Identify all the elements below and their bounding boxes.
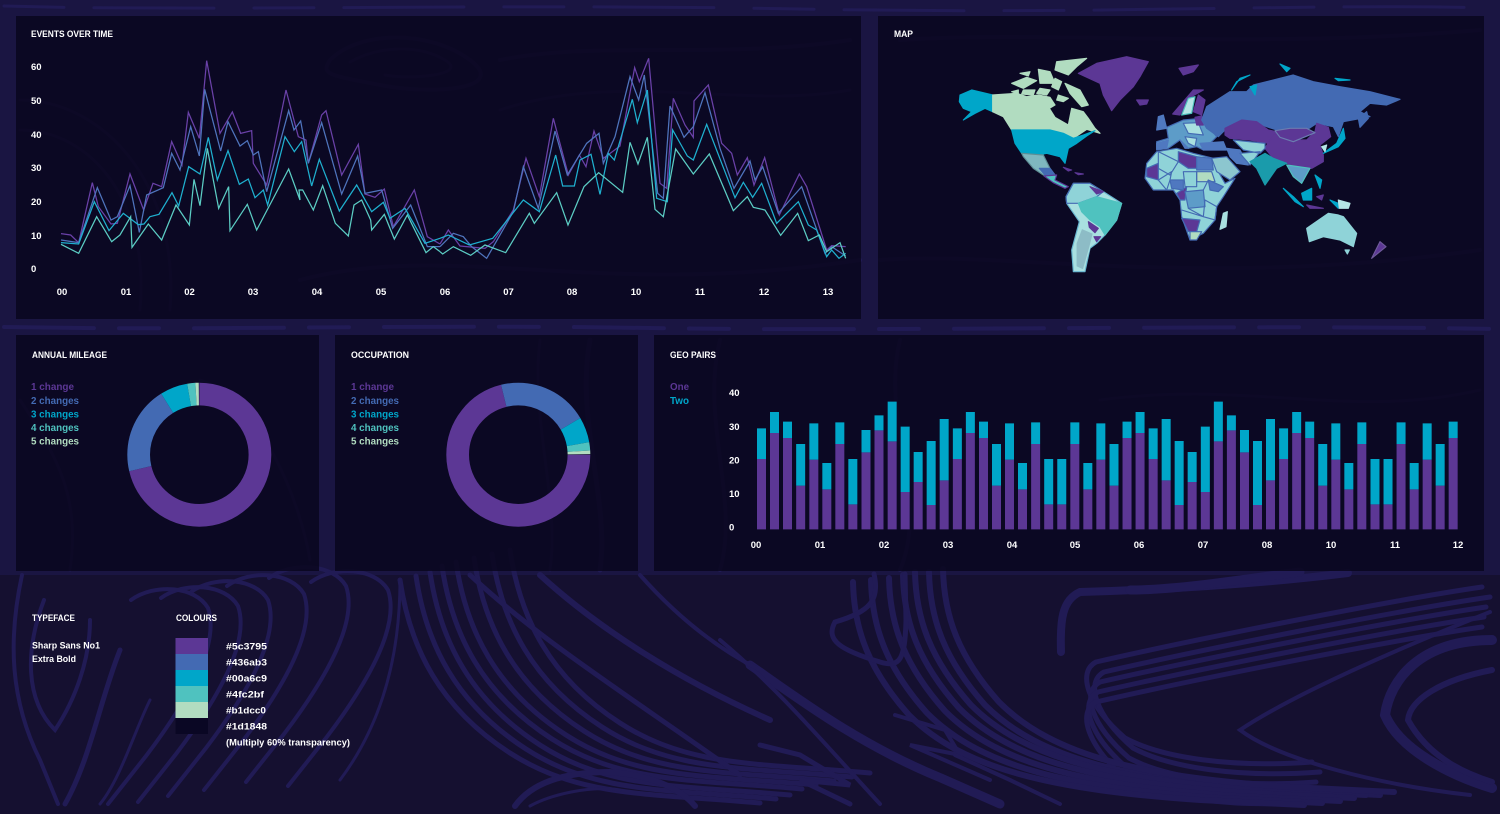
- legend: annual mileage: 5 changes: [31, 436, 79, 448]
- x axis: events: 12: [759, 287, 769, 298]
- legend: occupation: 3 changes: [351, 410, 399, 420]
- middle east and central asia: [1212, 140, 1265, 180]
- greenland and iceland: [1078, 57, 1198, 111]
- x axis: geo pairs: 07: [1198, 540, 1208, 551]
- x axis: geo pairs: 08: [1262, 540, 1272, 551]
- world map: [959, 57, 1400, 272]
- legend: occupation: 2 changes: [351, 396, 399, 407]
- y axis: events: 20: [31, 197, 42, 208]
- north america: [959, 58, 1100, 188]
- x axis: geo pairs: 12: [1453, 540, 1463, 551]
- colour codes: [226, 642, 350, 748]
- x axis: geo pairs: 00: [751, 540, 761, 551]
- x axis: events: 06: [440, 287, 450, 298]
- colour swatches: [176, 638, 208, 734]
- x axis: events: 08: [567, 287, 577, 298]
- panel: events over time: [16, 16, 861, 319]
- legend: annual mileage: 4 changes: [31, 423, 79, 434]
- legend: occupation: 1 change: [351, 382, 394, 393]
- russia: [1202, 75, 1400, 137]
- legend: annual mileage: 2 changes: [31, 396, 79, 407]
- colour codes: #00a6c9: [226, 674, 267, 684]
- y axis: geo pairs: [729, 388, 740, 534]
- x axis: events: 02: [184, 287, 195, 298]
- y axis: events: 10: [31, 231, 42, 242]
- heading: occupation: OCCUPATION: [351, 350, 409, 361]
- colour codes: #b1dcc0: [226, 706, 266, 716]
- y axis: events: 60: [31, 62, 42, 73]
- bars: two: [757, 402, 1458, 505]
- y axis: geo pairs: 30: [729, 422, 740, 433]
- line chart: events over time: [61, 58, 846, 258]
- legend: geo pairs: [670, 382, 689, 407]
- typeface name: Sharp Sans No1: [32, 640, 101, 652]
- x axis: geo pairs: 11: [1390, 540, 1401, 551]
- legend: annual mileage: [31, 382, 79, 448]
- donut: annual mileage: [139, 394, 260, 515]
- colour codes: #5c3795: [226, 642, 268, 652]
- panel: annual mileage: [16, 335, 319, 571]
- typeface name: [32, 640, 101, 665]
- y axis: events: 0: [31, 264, 36, 275]
- x axis: geo pairs: 05: [1070, 540, 1081, 551]
- y axis: geo pairs: 20: [729, 456, 740, 466]
- x axis: events: 01: [121, 287, 132, 298]
- legend: geo pairs: Two: [670, 396, 689, 407]
- bars: one: [757, 430, 1458, 529]
- south and southeast asia: [1250, 128, 1350, 208]
- x axis: geo pairs: [751, 540, 1463, 551]
- australia and new zealand: [1307, 213, 1386, 258]
- donut: occupation: [458, 394, 579, 515]
- y axis: geo pairs: 10: [729, 489, 740, 500]
- x axis: events: 10: [631, 287, 641, 298]
- y axis: geo pairs: 0: [729, 522, 734, 534]
- south america: [1066, 183, 1122, 272]
- x axis: events: 13: [823, 287, 833, 298]
- x axis: geo pairs: 10: [1326, 540, 1336, 551]
- x axis: geo pairs: 01: [815, 540, 826, 551]
- heading: events over time: EVENTS OVER TIME: [31, 29, 113, 40]
- y axis: events: 40: [31, 130, 42, 141]
- legend: occupation: 4 changes: [351, 423, 399, 434]
- heading: typeface: TYPEFACE: [32, 613, 75, 624]
- typeface name: Extra Bold: [32, 654, 76, 665]
- heading: colours: COLOURS: [176, 613, 217, 624]
- y axis: geo pairs: 40: [729, 388, 740, 399]
- stacked bar chart: geo pairs: [757, 402, 1458, 529]
- y axis: events: 50: [31, 96, 42, 107]
- legend: annual mileage: 1 change: [31, 382, 74, 393]
- x axis: geo pairs: 03: [943, 540, 953, 551]
- legend: occupation: [351, 382, 399, 448]
- kazakhstan, mongolia, china: [1225, 120, 1331, 168]
- x axis: events: [57, 287, 833, 298]
- x axis: events: 07: [503, 287, 514, 298]
- africa: [1145, 148, 1235, 240]
- legend: geo pairs: One: [670, 382, 689, 393]
- heading: geo pairs: GEO PAIRS: [670, 350, 716, 361]
- panel: map: [878, 16, 1484, 319]
- colour codes: #436ab3: [226, 658, 267, 668]
- x axis: geo pairs: 02: [879, 540, 889, 551]
- heading: annual mileage: ANNUAL MILEAGE: [32, 350, 107, 361]
- europe: [1157, 90, 1227, 150]
- colour codes: #1d1848: [226, 722, 267, 732]
- x axis: geo pairs: 06: [1134, 540, 1144, 551]
- colour codes: #4fc2bf: [226, 690, 265, 700]
- panel: geo pairs: [654, 335, 1484, 571]
- panel: occupation: [335, 335, 638, 571]
- arctic islands: [1232, 64, 1350, 95]
- heading: map: MAP: [894, 29, 914, 40]
- colour codes: (Multiply 60% transparency): [226, 738, 350, 748]
- x axis: events: 03: [248, 287, 258, 298]
- x axis: events: 11: [695, 287, 706, 298]
- x axis: events: 00: [57, 287, 67, 298]
- y axis: events: [31, 62, 42, 275]
- x axis: geo pairs: 04: [1007, 540, 1018, 551]
- legend: annual mileage: 3 changes: [31, 410, 79, 420]
- x axis: events: 04: [312, 287, 323, 298]
- legend: occupation: 5 changes: [351, 436, 399, 448]
- x axis: events: 05: [376, 287, 387, 298]
- y axis: events: 30: [31, 163, 42, 174]
